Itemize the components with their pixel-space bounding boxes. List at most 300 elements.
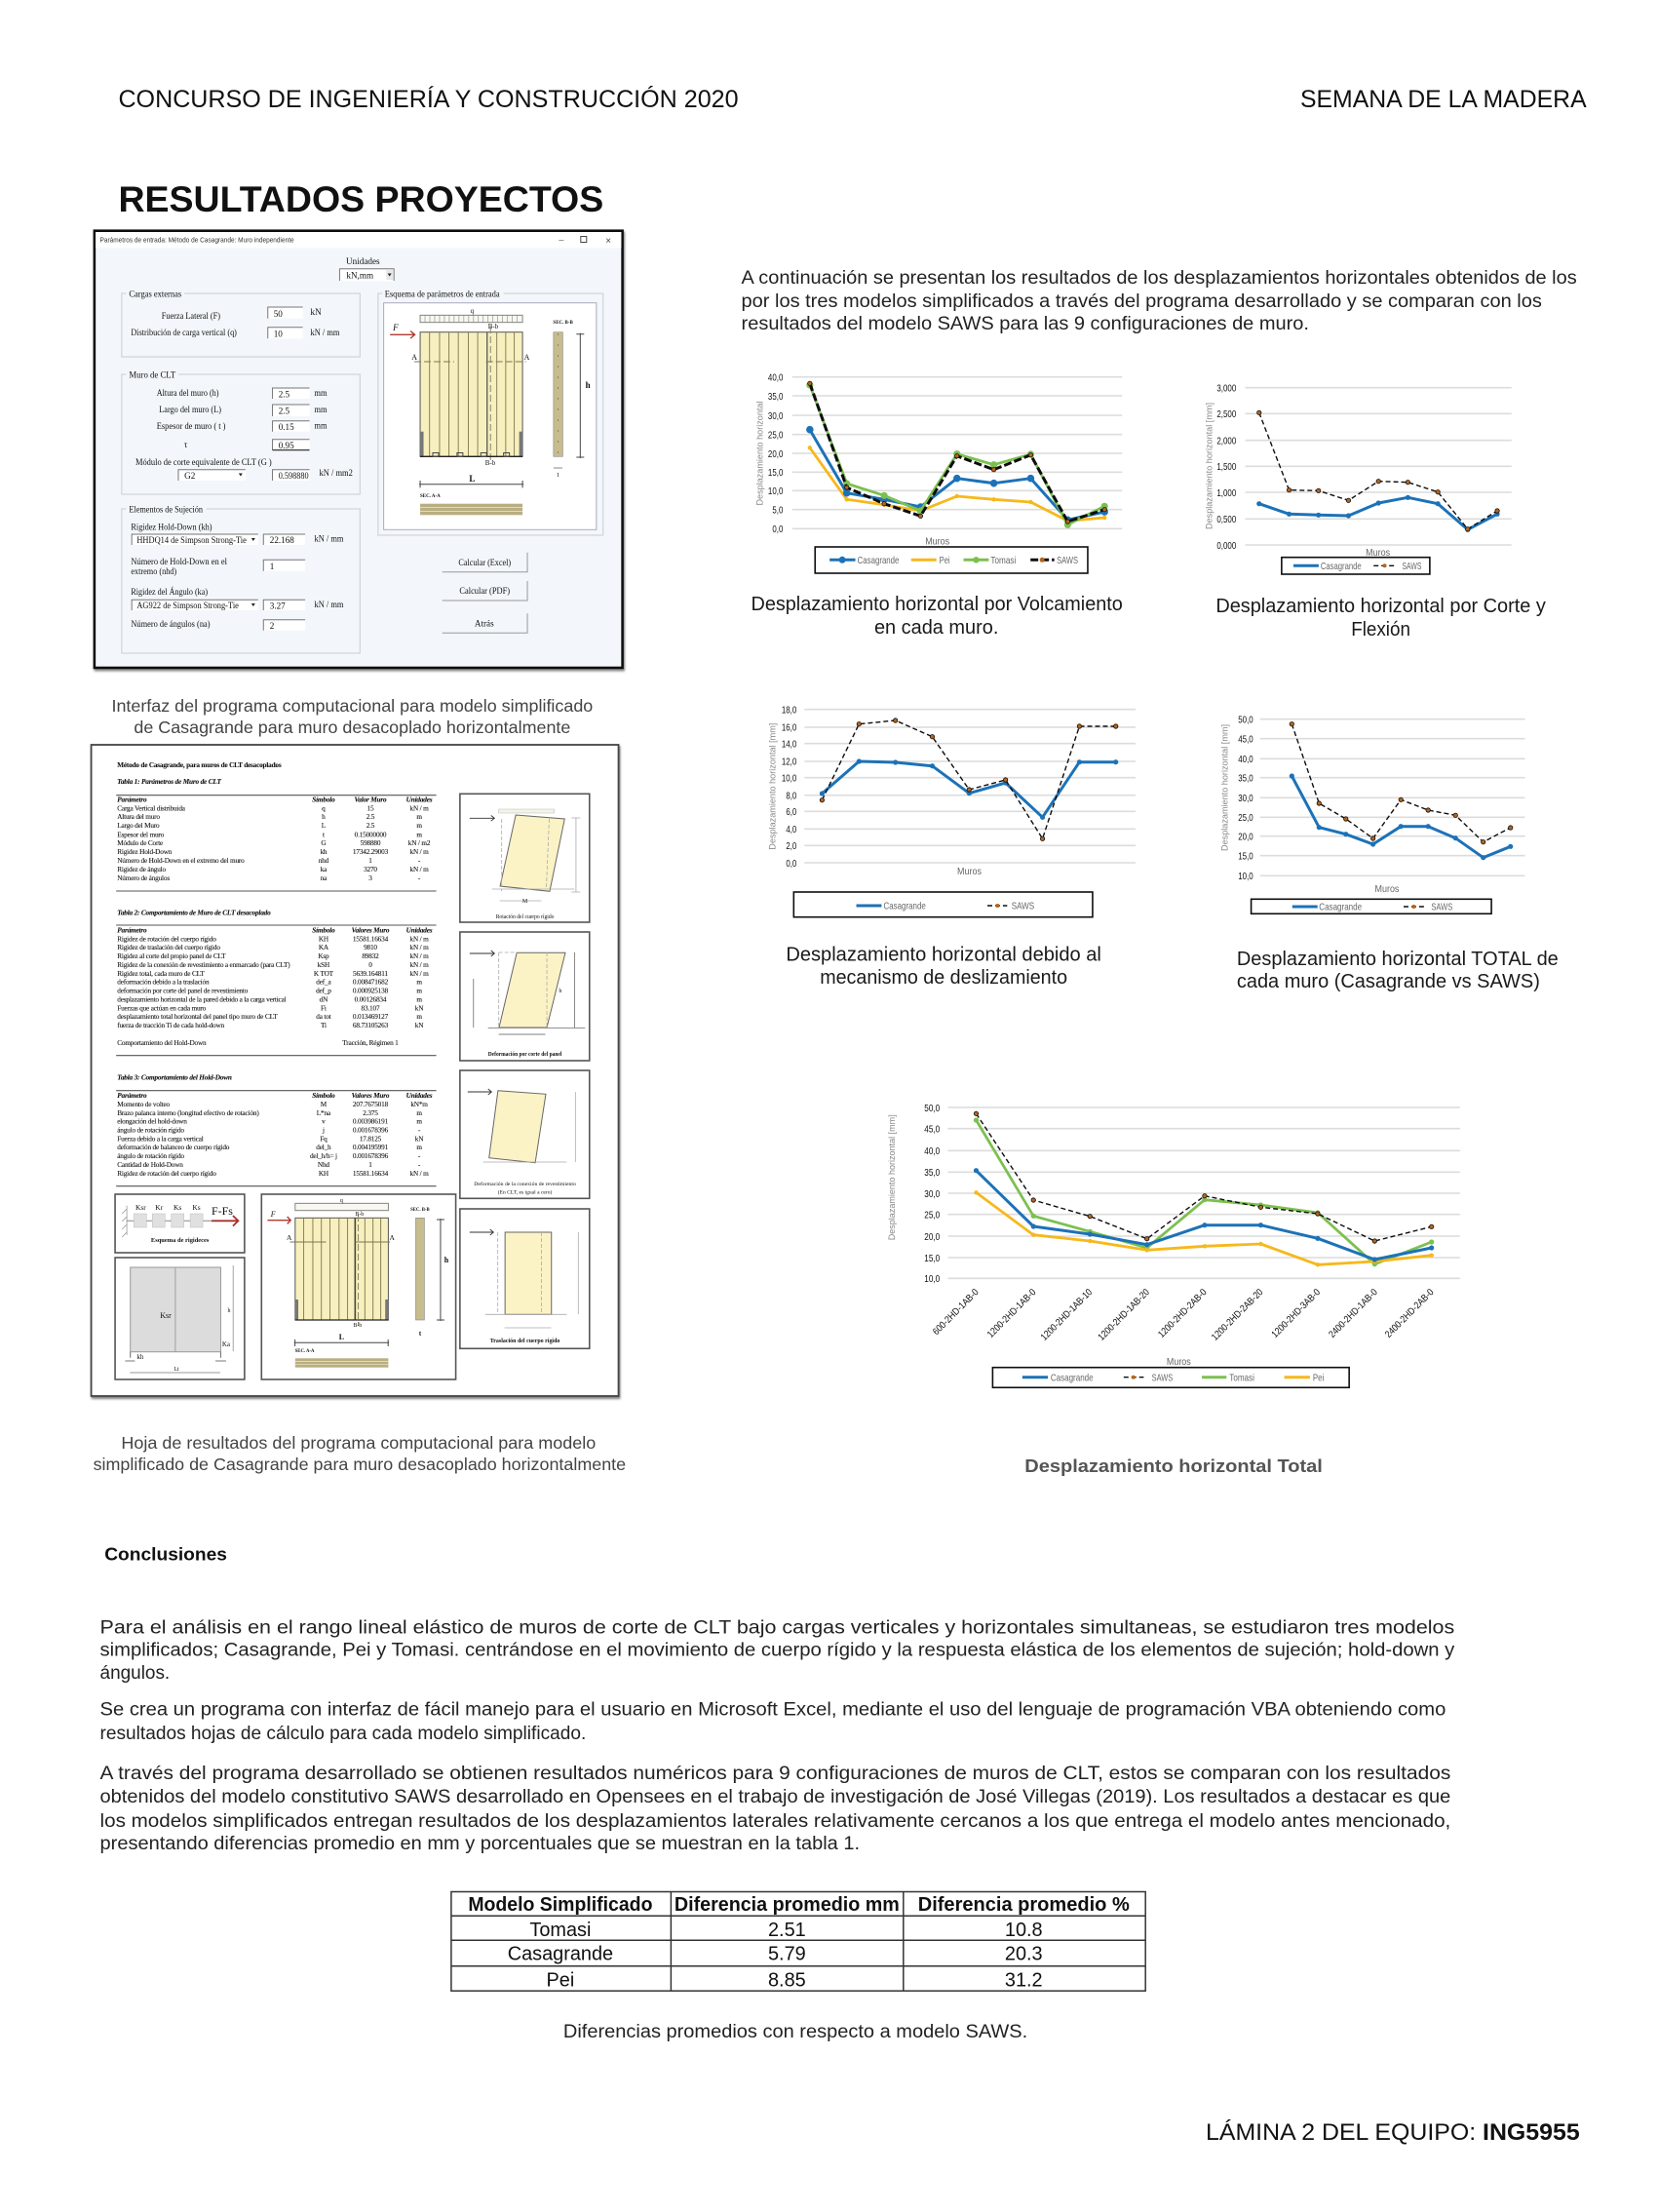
diagram: stiffness scheme: Ksr bbox=[135, 1203, 146, 1212]
table 2: decoupled wall behaviour: fuerza de tracción Ti de cada hold-down bbox=[117, 1022, 225, 1029]
table 1: wall parameters: m bbox=[416, 831, 422, 839]
chart: total displacement per wall: 20,0 bbox=[1238, 832, 1253, 843]
table 2: decoupled wall behaviour: desplazamiento total horizontal del panel tipo muro de CLT bbox=[117, 1013, 278, 1021]
heading: conclusions: Conclusiones bbox=[104, 1543, 227, 1565]
table 3: hold-down behaviour: Parámetro bbox=[117, 1092, 147, 1100]
table 2: decoupled wall behaviour: kN / m bbox=[410, 952, 429, 960]
table 2: decoupled wall behaviour: 89832 bbox=[362, 952, 379, 960]
table 1: wall parameters: Número de Hold-Down en el extremo del muro bbox=[117, 857, 245, 865]
conclusions: paragraph 1: simplificados; Casagrande, Pei y Tomasi. centrándose en el movimiento de cuerpo rígido y la respuesta elástica de los elementos de sujeción; hold-down y bbox=[100, 1639, 1455, 1661]
chart: total displacement all models: 600-2HD-1AB-0 bbox=[931, 1287, 982, 1338]
diagram: sheathing connection deformation bbox=[460, 1070, 590, 1198]
panel: program interface screenshot: AG922 de Simpson Strong-Tie bbox=[136, 601, 239, 610]
table 1: wall parameters: - bbox=[418, 874, 421, 882]
chart: sliding displacement: 10,0 bbox=[782, 773, 797, 785]
caption: shear and bending: Desplazamiento horizontal por Corte y bbox=[1215, 596, 1546, 617]
table 2: decoupled wall behaviour: Fi bbox=[321, 1004, 327, 1013]
table 3: hold-down behaviour: Símbolo bbox=[312, 1092, 335, 1100]
panel: program interface screenshot: Calcular (PDF) bbox=[459, 586, 510, 596]
table 1: wall parameters: Carga Vertical distribuida bbox=[117, 804, 186, 813]
table 2: decoupled wall behaviour: Tracción, Régimen 1 bbox=[342, 1039, 399, 1047]
chart: total displacement per wall: 50,0 bbox=[1238, 715, 1253, 726]
table 1: wall parameters: 2.5 bbox=[366, 813, 375, 821]
table 1: wall parameters: Parámetro bbox=[117, 796, 147, 804]
table: average differences: Pei bbox=[547, 1969, 574, 1992]
intro text: resultados del modelo SAWS para las 9 configuraciones de muro. bbox=[742, 313, 1309, 334]
table 1: wall parameters: Valor Muro bbox=[354, 796, 387, 804]
legend: Casagrande bbox=[884, 901, 926, 912]
table 2: decoupled wall behaviour: 68.73105263 bbox=[353, 1022, 389, 1029]
table 1: wall parameters: kh bbox=[320, 848, 328, 856]
chart: total displacement per wall: 25,0 bbox=[1238, 813, 1253, 824]
table: average differences: Tomasi bbox=[529, 1920, 591, 1941]
table: average differences: 2.51 bbox=[768, 1920, 806, 1941]
diagram: wall elevation copy: h bbox=[444, 1256, 449, 1264]
caption: overturning: en cada muro. bbox=[874, 617, 998, 639]
panel: program interface screenshot: HHDQ14 de Simpson Strong-Tie bbox=[136, 535, 247, 545]
panel: program interface screenshot: Cargas externas bbox=[129, 289, 182, 299]
table 3: hold-down behaviour: ángulo de rotación rígido bbox=[117, 1126, 184, 1135]
intro text bbox=[742, 267, 1577, 334]
table 3: hold-down behaviour: m bbox=[416, 1109, 422, 1117]
panel: program interface screenshot: Número de Hold-Down en el bbox=[131, 557, 227, 566]
diagram: wall elevation copy: q bbox=[340, 1198, 343, 1204]
table 2: decoupled wall behaviour: 83.107 bbox=[362, 1004, 380, 1013]
panel: program interface screenshot: 2.5 bbox=[279, 389, 290, 400]
table 1: wall parameters: Símbolo bbox=[312, 796, 335, 804]
table 2: decoupled wall behaviour: desplazamiento horizontal de la pared debido a la carga vertical bbox=[117, 995, 287, 1004]
table 1: wall parameters: m bbox=[416, 813, 422, 821]
conclusions: paragraph 3: presentando diferencias promedio en mm y porcentuales que se muestran en la tabla 1. bbox=[100, 1833, 860, 1854]
table 2: decoupled wall behaviour: def_a bbox=[316, 978, 331, 987]
table 2: decoupled wall behaviour: 9810 bbox=[364, 944, 377, 951]
table 3: hold-down behaviour: Valores Muro bbox=[352, 1092, 390, 1100]
diagram: rigid body rotation bbox=[460, 794, 590, 922]
chart: total displacement all models: Desplazamiento horizontal [mm] bbox=[887, 1114, 898, 1240]
chart: total displacement all models: 10,0 bbox=[924, 1274, 941, 1285]
chart: shear and bending displacement bbox=[1204, 383, 1512, 574]
panel: results sheet screenshot: Tabla 1: Parámetros de Muro de CLT bbox=[117, 778, 222, 786]
table 2: decoupled wall behaviour: da tot bbox=[316, 1013, 331, 1021]
table 1: wall parameters: 15 bbox=[367, 804, 374, 813]
table 2: decoupled wall behaviour: Valores Muro bbox=[352, 926, 390, 935]
chart: sliding displacement: 2,0 bbox=[786, 841, 797, 852]
chart: shear and bending displacement: 1,500 bbox=[1216, 462, 1237, 473]
chart: sliding displacement: 6,0 bbox=[786, 807, 797, 818]
table 2: decoupled wall behaviour: KH bbox=[319, 935, 329, 944]
panel: results sheet screenshot: Tabla 3: Comportamiento del Hold-Down bbox=[117, 1073, 232, 1082]
legend: Casagrande bbox=[1319, 902, 1362, 913]
panel: program interface screenshot: kN / mm bbox=[311, 328, 339, 337]
table 2: decoupled wall behaviour: 0.008471682 bbox=[353, 978, 389, 987]
table 3: hold-down behaviour: Brazo palanca interno (longitud efectivo de rotación) bbox=[117, 1109, 259, 1117]
footer: sheet number: LÁMINA 2 DEL EQUIPO: ING5955 bbox=[1206, 2119, 1580, 2146]
conclusions: paragraph 3 bbox=[100, 1763, 1450, 1854]
panel: program interface screenshot: kN / mm bbox=[315, 533, 343, 544]
diagram: wall stiffness model: Lt bbox=[174, 1367, 179, 1373]
diagram: wall stiffness model: Ksr bbox=[160, 1311, 172, 1320]
chart: total displacement all models: 1200-2HD-1AB-20 bbox=[1097, 1287, 1152, 1343]
table 1: wall parameters: 3 bbox=[368, 874, 372, 882]
panel: program interface screenshot: kN / mm bbox=[315, 600, 343, 609]
panel: program interface screenshot: Rigidez del Ángulo (ka) bbox=[131, 587, 208, 597]
table 2: decoupled wall behaviour: Rigidez total, cada muro de CLT bbox=[117, 970, 205, 978]
panel: program interface screenshot: G2 bbox=[184, 471, 196, 481]
table 2: decoupled wall behaviour: kN bbox=[415, 1022, 424, 1029]
intro text: A continuación se presentan los resultados de los desplazamientos horizontales obtenidos de los bbox=[742, 267, 1577, 289]
table 3: hold-down behaviour bbox=[117, 1092, 433, 1178]
panel: program interface screenshot: Espesor de muro ( t ) bbox=[157, 421, 225, 431]
chart: overturning displacement: 25,0 bbox=[768, 430, 784, 442]
table: average differences: Diferencia promedio mm bbox=[675, 1894, 900, 1916]
diagram: wall elevation copy: t bbox=[419, 1330, 422, 1338]
caption: total all models: Desplazamiento horizontal Total bbox=[1024, 1455, 1323, 1476]
table 1: wall parameters: Espesor del muro bbox=[117, 831, 165, 839]
diagram: rigid body rotation: M bbox=[522, 899, 528, 905]
table 2: decoupled wall behaviour: dN bbox=[320, 995, 328, 1004]
wall elevation diagram bbox=[390, 307, 591, 515]
caption: sliding: Desplazamiento horizontal debido al bbox=[786, 944, 1101, 966]
chart: total displacement per wall: Desplazamiento horizontal [mm] bbox=[1219, 724, 1230, 851]
legend bbox=[1282, 558, 1430, 574]
table 2: decoupled wall behaviour: Rigidez al corte del propio panel de CLT bbox=[117, 952, 226, 960]
diagram: wall elevation copy: SEC. B-B bbox=[410, 1208, 430, 1213]
caption: total per wall: Desplazamiento horizontal TOTAL de bbox=[1237, 949, 1559, 970]
chart: total displacement all models: 2400-2HD-2AB-0 bbox=[1383, 1287, 1437, 1340]
panel: program interface screenshot: Distribución de carga vertical (q) bbox=[131, 328, 237, 337]
table 3: hold-down behaviour: kN bbox=[415, 1135, 424, 1144]
chart: total displacement per wall: 35,0 bbox=[1238, 773, 1253, 785]
table 1: wall parameters: Largo del Muro bbox=[117, 822, 160, 830]
chart: total displacement all models: Muros bbox=[1167, 1357, 1191, 1368]
table 1: wall parameters: t bbox=[323, 831, 325, 839]
panel: program interface screenshot: – bbox=[558, 235, 564, 246]
chart: total displacement per wall: 45,0 bbox=[1238, 734, 1253, 746]
panel: program interface screenshot: Esquema de parámetros de entrada bbox=[385, 289, 500, 299]
table: average differences: 5.79 bbox=[768, 1943, 806, 1965]
chart: shear and bending displacement: 0,500 bbox=[1216, 515, 1237, 525]
diagram: stiffness scheme: Ks bbox=[174, 1203, 181, 1212]
chart: total displacement per wall: 15,0 bbox=[1238, 851, 1253, 863]
chart: shear and bending displacement: Muros bbox=[1366, 548, 1390, 559]
panel: program interface screenshot: mm bbox=[315, 420, 327, 431]
legend: SAWS bbox=[1057, 556, 1078, 566]
table 2: decoupled wall behaviour: Símbolo bbox=[312, 926, 335, 935]
conclusions: paragraph 2 bbox=[100, 1698, 1446, 1744]
table 3: hold-down behaviour: Fq bbox=[320, 1135, 328, 1144]
panel: program interface screenshot: extremo (nhd) bbox=[131, 566, 176, 576]
diagram: wall elevation copy: B-b bbox=[353, 1323, 362, 1329]
chart: overturning displacement: 5,0 bbox=[772, 505, 784, 517]
table 3: hold-down behaviour: M bbox=[321, 1101, 328, 1108]
chart: shear and bending displacement: Desplazamiento horizontal [mm] bbox=[1204, 403, 1215, 529]
caption: shear and bending: Flexión bbox=[1351, 619, 1410, 640]
table 2: decoupled wall behaviour: 0.000925138 bbox=[353, 987, 389, 995]
table 3: hold-down behaviour: 0.003986191 bbox=[353, 1117, 389, 1126]
diagram: wall elevation copy: F bbox=[270, 1210, 276, 1219]
panel: program interface screenshot: mm bbox=[315, 405, 327, 414]
wall elevation diagram: SEC. A-A bbox=[420, 494, 441, 499]
chart: total displacement per wall: 40,0 bbox=[1238, 755, 1253, 765]
table 2: decoupled wall behaviour: m bbox=[416, 1013, 422, 1021]
table 2: decoupled wall behaviour: Unidades bbox=[406, 926, 433, 935]
chart: total displacement all models bbox=[887, 1104, 1460, 1387]
diagram: wall stiffness model: h bbox=[227, 1308, 230, 1314]
wall elevation diagram: L bbox=[469, 474, 475, 484]
table 2: decoupled wall behaviour: Rigidez de rotación del cuerpo rígido bbox=[117, 935, 216, 944]
table 2: decoupled wall behaviour: Rigidez de la conexión de revestimiento a enmarcado (para CLT) bbox=[117, 961, 290, 969]
table 3: hold-down behaviour: 17.8125 bbox=[360, 1135, 382, 1144]
table 1: wall parameters: m bbox=[416, 822, 422, 830]
panel: program interface screenshot: Altura del muro (h) bbox=[157, 388, 218, 398]
table 2: decoupled wall behaviour: kN / m bbox=[410, 970, 429, 978]
legend: Pei bbox=[1313, 1373, 1324, 1384]
panel: program interface screenshot bbox=[95, 231, 623, 668]
diagram: rigid body translation bbox=[460, 1209, 590, 1348]
diagram: rigid body translation: Traslación del cuerpo rígido bbox=[490, 1338, 559, 1344]
table: average differences: Casagrande bbox=[508, 1943, 613, 1965]
wall elevation diagram: B-b bbox=[485, 459, 496, 467]
legend: Casagrande bbox=[1051, 1373, 1094, 1384]
table 2: decoupled wall behaviour: kN bbox=[415, 1004, 424, 1013]
wall elevation diagram: B-b bbox=[488, 323, 499, 330]
table 2: decoupled wall behaviour: m bbox=[416, 987, 422, 995]
chart: overturning displacement: 40,0 bbox=[768, 372, 784, 384]
table 2: decoupled wall behaviour: kN / m bbox=[410, 935, 429, 944]
panel: results sheet screenshot bbox=[92, 745, 619, 1396]
intro text: por los tres modelos simplificados a través del programa desarrollado y se comparan con los bbox=[742, 291, 1542, 312]
diagram: sheathing connection deformation: Deformación de la conexión de revestimiento bbox=[474, 1181, 576, 1187]
wall elevation diagram: A bbox=[524, 353, 530, 362]
wall elevation diagram: h bbox=[586, 380, 591, 390]
legend: SAWS bbox=[1402, 562, 1422, 572]
legend: Casagrande bbox=[1321, 562, 1362, 572]
chart: sliding displacement: Desplazamiento horizontal [mm] bbox=[767, 723, 778, 850]
chart: overturning displacement: 10,0 bbox=[768, 486, 784, 497]
table 2: decoupled wall behaviour: Fuerzas que actúan en cada muro bbox=[117, 1004, 207, 1013]
title: RESULTADOS PROYECTOS bbox=[118, 179, 603, 219]
table 3: hold-down behaviour: 0.001678396 bbox=[353, 1152, 389, 1160]
table 3: hold-down behaviour: L*na bbox=[317, 1109, 331, 1117]
chart: total displacement per wall: Muros bbox=[1375, 884, 1399, 895]
table: average differences bbox=[451, 1891, 1145, 1992]
diagram: panel shear deformation: Deformación por corte del panel bbox=[488, 1051, 562, 1058]
table 3: hold-down behaviour: ángulo de rotación rígido bbox=[117, 1152, 184, 1160]
legend: Tomasi bbox=[990, 556, 1016, 566]
table 1: wall parameters: 0.15000000 bbox=[355, 831, 387, 839]
table 1: wall parameters: na bbox=[321, 874, 328, 882]
table 2: decoupled wall behaviour: def_p bbox=[316, 987, 331, 995]
table 1: wall parameters: kN / m bbox=[410, 848, 429, 856]
legend bbox=[992, 1368, 1349, 1387]
table: average differences: 10.8 bbox=[1005, 1920, 1043, 1941]
panel: program interface screenshot: 10 bbox=[274, 329, 283, 339]
table 3: hold-down behaviour: - bbox=[418, 1152, 421, 1160]
table 1: wall parameters: 598880 bbox=[361, 839, 381, 847]
diagram: wall elevation copy: B-b bbox=[355, 1212, 364, 1218]
diagram: wall stiffness model: kh bbox=[136, 1353, 144, 1361]
chart: total displacement all models: 1200-2HD-2AB-0 bbox=[1156, 1287, 1210, 1340]
table 1: wall parameters: q bbox=[322, 804, 326, 813]
conclusions: paragraph 3: obtenidos del modelo constitutivo SAWS desarrollado en Opensees en el trabajo de investigación de José Villegas (2019). Los resultados a destacar es que bbox=[100, 1786, 1450, 1807]
chart: total displacement all models: 15,0 bbox=[924, 1254, 941, 1264]
panel: program interface screenshot: 3.27 bbox=[270, 601, 286, 611]
table 1: wall parameters: kN / m bbox=[410, 804, 429, 813]
table 1: wall parameters: ka bbox=[321, 866, 328, 873]
diagram: panel shear deformation: h bbox=[559, 989, 561, 994]
table 2: decoupled wall behaviour: kN / m bbox=[410, 944, 429, 951]
table 3: hold-down behaviour: v bbox=[322, 1117, 326, 1126]
chart: total displacement all models: 20,0 bbox=[924, 1232, 941, 1243]
conclusions: paragraph 3: A través del programa desarrollado se obtienen resultados numéricos para 9 configuraciones de muros de CLT, estos se comparan con los resultados bbox=[100, 1763, 1450, 1784]
panel: program interface screenshot: Atrás bbox=[475, 618, 494, 629]
caption: overturning: Desplazamiento horizontal por Volcamiento bbox=[752, 594, 1123, 615]
panel: results sheet screenshot: Tabla 2: Comportamiento de Muro de CLT desacoplado bbox=[117, 909, 271, 917]
table 3: hold-down behaviour: 0.004195991 bbox=[353, 1144, 389, 1151]
conclusions: paragraph 1 bbox=[100, 1616, 1455, 1684]
table 1: wall parameters: Módulo de Corte bbox=[117, 839, 163, 847]
table 2: decoupled wall behaviour bbox=[117, 926, 433, 1047]
table 1: wall parameters bbox=[117, 796, 433, 882]
table 3: hold-down behaviour: 207.7675018 bbox=[353, 1101, 389, 1108]
caption: results sheet: simplificado de Casagrande para muro desacoplado horizontalmente bbox=[94, 1455, 626, 1474]
legend bbox=[793, 892, 1093, 917]
panel: program interface screenshot: kN,mm bbox=[346, 270, 373, 281]
table 2: decoupled wall behaviour: K TOT bbox=[314, 970, 334, 978]
diagram: sheathing connection deformation: (En CLT, es igual a cero) bbox=[498, 1188, 553, 1196]
diagram: wall elevation copy: SEC. A-A bbox=[295, 1349, 315, 1354]
table 3: hold-down behaviour: m bbox=[416, 1117, 422, 1126]
table 1: wall parameters: Rigidez Hold-Down bbox=[117, 848, 173, 856]
panel: program interface screenshot: kN bbox=[311, 307, 322, 317]
table 2: decoupled wall behaviour: deformación por corte del panel de revestimiento bbox=[117, 987, 249, 995]
table 1: wall parameters: Unidades bbox=[406, 796, 433, 804]
table 3: hold-down behaviour: Fuerza debido a la carga vertical bbox=[117, 1135, 204, 1144]
chart: overturning displacement: 30,0 bbox=[768, 411, 784, 422]
legend: Pei bbox=[940, 556, 950, 566]
table 1: wall parameters: nhd bbox=[319, 857, 329, 865]
conclusions: paragraph 1: Para el análisis en el rango lineal elástico de muros de corte de CLT bajo cargas verticales y horizontales simultaneas, se estudiaron tres modelos bbox=[100, 1616, 1454, 1639]
chart: overturning displacement: 15,0 bbox=[768, 468, 784, 479]
table 1: wall parameters: Número de ángulos bbox=[117, 874, 170, 882]
table 2: decoupled wall behaviour: Ti bbox=[321, 1022, 327, 1029]
table 2: decoupled wall behaviour: 0 bbox=[368, 961, 372, 969]
table 3: hold-down behaviour: kN*m bbox=[410, 1101, 428, 1108]
panel: program interface screenshot: 22.168 bbox=[270, 535, 294, 545]
wall elevation diagram: SEC. B-B bbox=[553, 321, 574, 326]
diagram: wall elevation copy bbox=[261, 1194, 456, 1379]
panel: program interface screenshot: 0.95 bbox=[279, 441, 294, 450]
diagram: stiffness scheme bbox=[115, 1194, 245, 1253]
panel: program interface screenshot: 0.598880 bbox=[279, 471, 309, 481]
table 1: wall parameters: 3270 bbox=[364, 866, 377, 873]
chart: total displacement all models: 35,0 bbox=[924, 1168, 941, 1179]
table 3: hold-down behaviour: Momento de volteo bbox=[117, 1101, 171, 1108]
panel: program interface screenshot: Fuerza Lateral (F) bbox=[162, 311, 220, 321]
panel: program interface screenshot: mm bbox=[315, 388, 327, 398]
chart: total displacement per wall: 10,0 bbox=[1238, 872, 1253, 882]
chart: shear and bending displacement: 2,000 bbox=[1216, 436, 1237, 447]
table 3: hold-down behaviour: - bbox=[418, 1161, 421, 1169]
table 3: hold-down behaviour: 0.001678396 bbox=[353, 1126, 389, 1135]
diagram: panel shear deformation bbox=[460, 932, 590, 1061]
panel: program interface screenshot: 2 bbox=[270, 621, 275, 631]
table: average differences: Modelo Simplificado bbox=[468, 1894, 652, 1916]
chart: total displacement all models: 30,0 bbox=[924, 1189, 941, 1200]
table 1: wall parameters: Rigidez de ángulo bbox=[117, 866, 167, 873]
legend: Casagrande bbox=[858, 556, 900, 566]
chart: overturning displacement: Desplazamiento horizontal bbox=[754, 402, 765, 505]
caption: interface bbox=[111, 696, 593, 737]
table 1: wall parameters: kN / m2 bbox=[408, 839, 431, 847]
panel: program interface screenshot: 1 bbox=[270, 562, 275, 571]
table 2: decoupled wall behaviour: Parámetro bbox=[117, 926, 147, 935]
conclusions: paragraph 3: los modelos simplificados entregan resultados de los desplazamientos laterales relativamente cercanos a los que entrega el modelo antes mencionado, bbox=[100, 1810, 1450, 1832]
chart: sliding displacement: 4,0 bbox=[786, 825, 797, 835]
diagram: stiffness scheme: Esquema de rigideces bbox=[151, 1237, 210, 1244]
chart: sliding displacement: 12,0 bbox=[782, 757, 797, 768]
diagram: stiffness scheme: Kr bbox=[155, 1203, 164, 1212]
chart: total displacement all models: 50,0 bbox=[924, 1104, 941, 1114]
table 3: hold-down behaviour: Cantidad de Hold-Down bbox=[117, 1161, 183, 1169]
table 3: hold-down behaviour: del_h/h= j bbox=[310, 1152, 337, 1160]
caption: sliding bbox=[786, 944, 1101, 989]
chart: overturning displacement bbox=[754, 372, 1122, 573]
table 1: wall parameters: G bbox=[321, 839, 327, 847]
caption: table: Diferencias promedios con respecto a modelo SAWS. bbox=[563, 2021, 1027, 2042]
caption: results sheet bbox=[94, 1433, 626, 1474]
chart: total displacement per wall: 30,0 bbox=[1238, 794, 1253, 804]
panel: program interface screenshot: 50 bbox=[274, 309, 283, 319]
chart: total displacement all models: 40,0 bbox=[924, 1146, 941, 1157]
table 2: decoupled wall behaviour: m bbox=[416, 995, 422, 1004]
table 1: wall parameters: 1 bbox=[368, 857, 372, 865]
panel: program interface screenshot: Módulo de corte equivalente de CLT (G ) bbox=[135, 457, 272, 467]
wall elevation diagram: q bbox=[471, 307, 475, 315]
table 3: hold-down behaviour: Nhd bbox=[318, 1161, 329, 1169]
caption: shear and bending bbox=[1215, 596, 1546, 640]
panel: program interface screenshot: Parámetros de entrada: Método de Casagrande: Muro independiente bbox=[100, 236, 294, 245]
legend: Tomasi bbox=[1229, 1373, 1254, 1384]
table 2: decoupled wall behaviour: 5639.164811 bbox=[353, 970, 388, 978]
table 1: wall parameters: 2.5 bbox=[366, 822, 375, 830]
table 3: hold-down behaviour: - bbox=[418, 1126, 421, 1135]
panel: program interface screenshot: Muro de CLT bbox=[129, 369, 176, 380]
table 1: wall parameters: - bbox=[418, 857, 421, 865]
table 1: wall parameters: Altura del muro bbox=[117, 813, 160, 821]
chart: sliding displacement: 0,0 bbox=[786, 859, 797, 870]
chart: total displacement all models: 1200-2HD-3AB-0 bbox=[1270, 1287, 1323, 1340]
panel: program interface screenshot: Rigidez Hold-Down (kh) bbox=[131, 523, 212, 532]
table 1: wall parameters: L bbox=[322, 822, 326, 830]
panel: results sheet screenshot: Método de Casagrande, para muros de CLT desacoplados bbox=[117, 761, 282, 769]
table 3: hold-down behaviour: KH bbox=[319, 1170, 329, 1178]
caption: total per wall: cada muro (Casagrande vs SAWS) bbox=[1237, 971, 1540, 992]
chart: sliding displacement: 14,0 bbox=[782, 739, 797, 751]
table 1: wall parameters: h bbox=[322, 813, 326, 821]
chart: sliding displacement: 8,0 bbox=[786, 791, 797, 802]
table 3: hold-down behaviour: deformación de balanceo de cuerpo rígido bbox=[117, 1144, 230, 1151]
legend: SAWS bbox=[1431, 902, 1453, 913]
table 3: hold-down behaviour: kN / m bbox=[410, 1170, 429, 1178]
diagram: rigid body rotation: Rotación del cuerpo rígido bbox=[496, 914, 554, 920]
table 3: hold-down behaviour: elongación del hold-down bbox=[117, 1117, 187, 1126]
table 3: hold-down behaviour: del_h bbox=[316, 1144, 331, 1151]
table 3: hold-down behaviour: 15581.16634 bbox=[353, 1170, 389, 1178]
caption: interface: de Casagrande para muro desacoplado horizontalmente bbox=[134, 718, 570, 737]
wall elevation diagram: F bbox=[392, 323, 399, 332]
chart: overturning displacement: Muros bbox=[925, 536, 949, 548]
